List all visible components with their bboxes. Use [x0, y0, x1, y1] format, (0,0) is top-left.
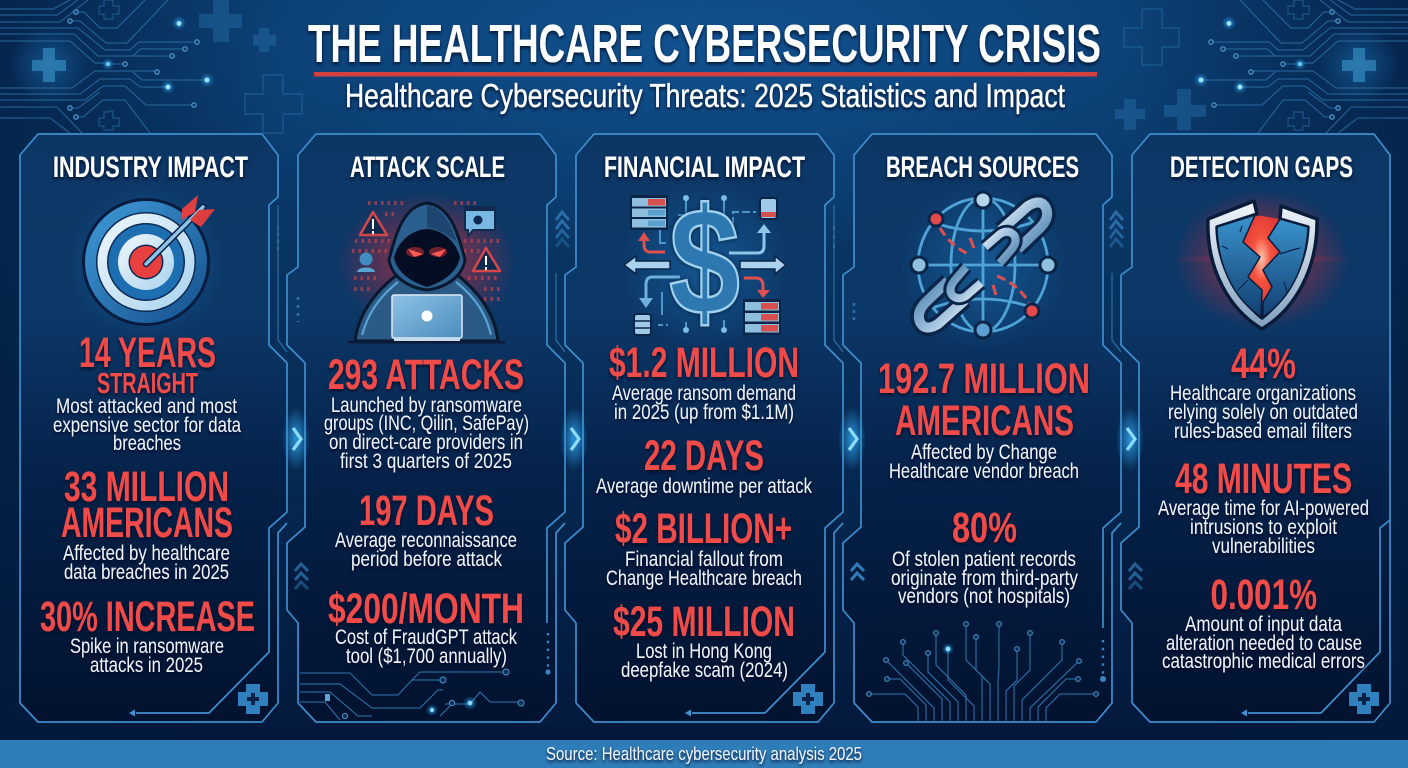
- stat: 44%: Healthcare organizations: [1170, 382, 1356, 405]
- stat: 22 days: 22 DAYS: [644, 432, 764, 480]
- stat: 48 minutes: vulnerabilities: [1212, 535, 1315, 558]
- stat: 30% increase: Spike in ransomware: [70, 635, 224, 658]
- stat: 33 million americans: 33 MILLION: [64, 463, 229, 511]
- stat: 192.7 million americans: 192.7 MILLION: [878, 355, 1090, 403]
- icon: hooded hacker at laptop: [337, 192, 517, 344]
- decoration: medical crosses: [32, 0, 1376, 133]
- decoration: circuit top-left: [0, 0, 214, 133]
- decoration: bottom circuit: [300, 669, 524, 720]
- heading: breach sources: BREACH SOURCES: [886, 151, 1079, 184]
- stat: $1.2 million: [609, 339, 799, 424]
- stat: $25 million: $25 MILLION: [613, 598, 795, 646]
- heading: attack scale: ATTACK SCALE: [350, 151, 505, 184]
- stat: 44%: relying solely on outdated: [1168, 401, 1358, 424]
- source text: Source: Healthcare cybersecurity analysis 2025: [546, 744, 862, 764]
- stat: 33 million americans: Affected by healthcare: [63, 542, 230, 565]
- panel: attack scale: [287, 134, 569, 722]
- panel: breach sources: [843, 134, 1123, 722]
- decoration: chevrons: [295, 564, 308, 589]
- decoration: chevrons: [1129, 564, 1142, 589]
- stat: 30% increase: 30% INCREASE: [40, 593, 255, 641]
- stat: 14 years straight: breaches: [113, 432, 181, 455]
- stat: 30% increase: attacks in 2025: [90, 654, 203, 677]
- stat: 293 attacks: 293 ATTACKS: [328, 351, 524, 399]
- stat: 0.001%: alteration needed to cause: [1166, 632, 1362, 655]
- stat: 80%: Of stolen patient records: [892, 548, 1076, 571]
- panel: detection gaps: [1121, 134, 1390, 722]
- stat: 80%: vendors (not hospitals): [898, 585, 1070, 608]
- stat: 0.001%: catastrophic medical errors: [1162, 650, 1365, 673]
- icon: medical cross badge: [793, 684, 823, 714]
- stat: 192.7 million americans: AMERICANS: [895, 397, 1074, 445]
- stat: 44%: rules-based email filters: [1174, 420, 1352, 443]
- icon: dollar sign with flows: [620, 177, 790, 348]
- arrow: panel 4 to 5: [1116, 407, 1144, 471]
- icon: medical cross badge: [1349, 684, 1379, 714]
- subtitle: Healthcare Cybersecurity Threats: 2025 Statistics and Impact: [345, 77, 1065, 114]
- stat: 197 days: period before attack: [351, 548, 502, 571]
- stat: 48 minutes: [1158, 455, 1369, 558]
- stat: 0.001%: [1162, 571, 1365, 673]
- decoration: circuit top-right: [1194, 0, 1408, 133]
- icon: dollar sign with flows: $: [669, 177, 740, 347]
- arrow: panel 1 to 2: [282, 407, 310, 471]
- stat: 33 million americans: [61, 463, 233, 584]
- stat: 293 attacks: on direct-care providers in: [329, 431, 523, 454]
- stat: 0.001%: Amount of input data: [1185, 613, 1342, 636]
- stat: 197 days: 197 DAYS: [359, 487, 494, 535]
- decoration: chevrons: [556, 212, 569, 247]
- icon: medical cross badge: [238, 684, 268, 714]
- heading: industry impact: INDUSTRY IMPACT: [53, 151, 248, 184]
- stat: $1.2 million: Average ransom demand: [612, 382, 796, 405]
- icon: target with arrow: [66, 182, 226, 342]
- stat: 197 days: [335, 487, 517, 571]
- panel: industry impact: [20, 134, 287, 722]
- stat: $200/month: [328, 585, 524, 668]
- stat: $25 million: Lost in Hong Kong: [636, 640, 772, 663]
- stat: $200/month: $200/MONTH: [328, 585, 524, 633]
- heading: financial impact: FINANCIAL IMPACT: [604, 151, 805, 184]
- stat: 48 minutes: intrusions to exploit: [1190, 516, 1337, 539]
- title underline: [314, 72, 1097, 76]
- arrow: panel 3 to 4: [838, 407, 866, 471]
- stat: $2 billion+: $2 BILLION+: [615, 505, 792, 553]
- stat: 33 million americans: AMERICANS: [61, 499, 233, 547]
- footer band: [0, 740, 1408, 768]
- stat: 293 attacks: first 3 quarters of 2025: [340, 450, 512, 473]
- stat: $2 billion+: Financial fallout from: [625, 548, 783, 571]
- stat: 293 attacks: Launched by ransomware: [331, 394, 522, 417]
- stat: 14 years straight: STRAIGHT: [97, 368, 198, 400]
- icon: broken chain over globe: [898, 180, 1068, 350]
- stat: $200/month: Cost of FraudGPT attack: [335, 626, 517, 649]
- stat: $2 billion+: [606, 505, 802, 590]
- stat: 14 years straight: 14 YEARS: [79, 329, 216, 377]
- stat: 44%: 44%: [1231, 340, 1296, 388]
- stat: $1.2 million: in 2025 (up from $1.1M): [614, 401, 794, 424]
- stat: 44%: [1168, 340, 1358, 443]
- icon: cracked shield: [1167, 189, 1357, 329]
- stat: 33 million americans: data breaches in 2025: [64, 561, 229, 584]
- stat: 80%: 80%: [952, 504, 1017, 552]
- decoration: chevrons: [851, 564, 864, 580]
- stat: $25 million: [613, 598, 795, 682]
- stat: 192.7 million americans: Healthcare vendor breach: [889, 460, 1079, 483]
- stat: 22 days: [596, 432, 812, 498]
- stat: 192.7 million americans: Affected by Change: [911, 441, 1057, 464]
- arrow: panel 2 to 3: [560, 407, 588, 471]
- stat: 197 days: Average reconnaissance: [335, 529, 517, 552]
- stat: 293 attacks: [324, 351, 529, 473]
- stat: 30% increase: [40, 593, 255, 677]
- stat: 22 days: Average downtime per attack: [596, 475, 812, 498]
- stat: 0.001%: 0.001%: [1210, 571, 1317, 619]
- stat: $25 million: deepfake scam (2024): [621, 659, 788, 682]
- stat: 80%: [891, 504, 1078, 608]
- stat: $2 billion+: Change Healthcare breach: [606, 567, 802, 590]
- stat: 14 years straight: expensive sector for data: [53, 414, 241, 437]
- decoration: chevrons: [1110, 212, 1123, 247]
- panel: financial impact: [565, 134, 843, 722]
- stat: 14 years straight: [53, 329, 241, 455]
- stat: 192.7 million americans: [878, 355, 1090, 483]
- stat: 293 attacks: groups (INC, Qilin, SafePay): [324, 412, 529, 435]
- stat: 80%: originate from third-party: [891, 567, 1078, 590]
- stat: 14 years straight: Most attacked and most: [56, 395, 237, 418]
- stat: $200/month: tool ($1,700 annually): [346, 645, 507, 668]
- stat: $1.2 million: $1.2 MILLION: [609, 339, 799, 387]
- decoration: bottom circuit fan: [867, 622, 1098, 722]
